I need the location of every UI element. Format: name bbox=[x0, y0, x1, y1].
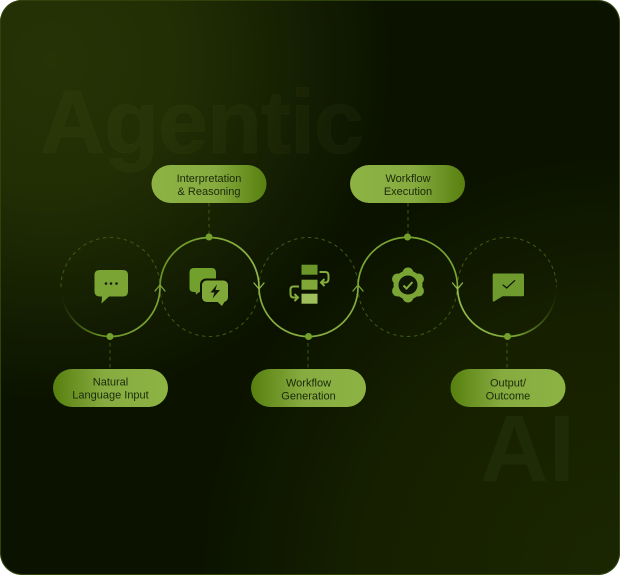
watermark word: Agentic: Agentic bbox=[40, 73, 363, 173]
icon: chat bubbles with lightning bbox=[190, 268, 230, 306]
flow path with arrows bbox=[61, 237, 556, 336]
dashed circle halves bbox=[61, 238, 556, 336]
pill: Output/Outcome: Outcome bbox=[486, 390, 530, 402]
pill: Natural Language Input: Natural bbox=[93, 376, 128, 388]
connector dashes bbox=[110, 203, 507, 369]
pill: Interpretation & Reasoning: Interpretation bbox=[177, 173, 241, 185]
pill: Workflow Generation: Workflow bbox=[286, 378, 331, 390]
icon: gear with check bbox=[394, 270, 422, 300]
icon: chat bubble with dots bbox=[94, 270, 128, 304]
pill: Workflow Execution bbox=[350, 165, 465, 203]
connector nodes bbox=[106, 234, 511, 340]
watermark word: AI: AI bbox=[480, 396, 575, 502]
pill: Workflow Execution: Workflow bbox=[385, 173, 431, 185]
pill: Interpretation & Reasoning bbox=[152, 165, 266, 203]
pill: Workflow Generation bbox=[251, 369, 366, 407]
icon: message with check bbox=[493, 274, 524, 302]
pill: Natural Language Input bbox=[53, 369, 168, 407]
pill: Workflow Generation: Generation bbox=[281, 390, 336, 402]
pill: Output/Outcome: Output/ bbox=[490, 378, 527, 390]
pill: Natural Language Input: Language Input bbox=[72, 390, 149, 402]
pill: Output/Outcome bbox=[450, 369, 566, 407]
pill: Interpretation & Reasoning: & Reasoning bbox=[178, 186, 240, 198]
pill: Workflow Execution: Execution bbox=[384, 186, 432, 198]
icon: stacked blocks with arrows bbox=[290, 265, 328, 304]
